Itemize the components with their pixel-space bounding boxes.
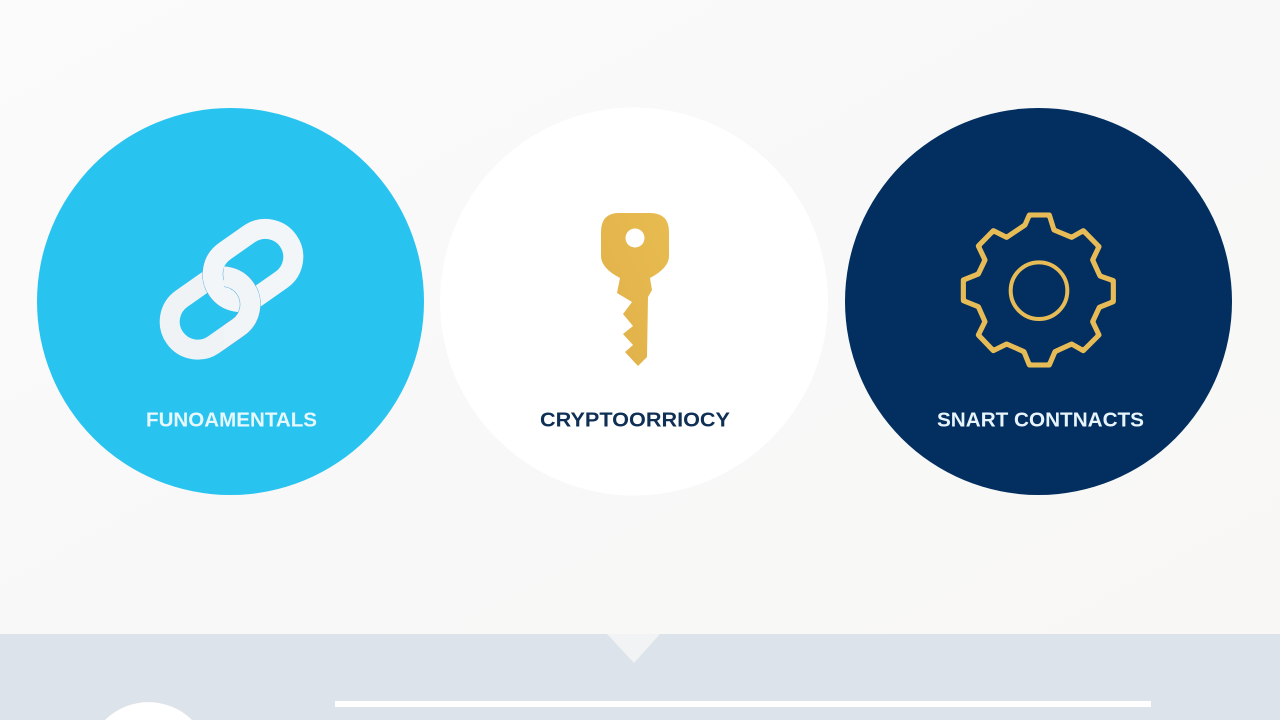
icon: chain link xyxy=(159,218,304,361)
icon: gear xyxy=(963,215,1113,365)
panel: smart contracts xyxy=(845,108,1232,495)
pointer triangle xyxy=(607,634,660,663)
text line placeholder xyxy=(335,701,1151,707)
label: cryptocurrency: CRYPTOORRIOCY xyxy=(540,408,730,432)
panel: fundamentals xyxy=(37,108,424,495)
icon: key xyxy=(601,213,669,366)
avatar circle xyxy=(105,702,192,720)
panel: cryptocurrency xyxy=(440,108,828,496)
label: smart contracts: SNART CONTNACTS xyxy=(937,408,1144,432)
label: fundamentals: FUNOAMENTALS xyxy=(146,408,317,432)
bottom band xyxy=(0,634,1280,720)
